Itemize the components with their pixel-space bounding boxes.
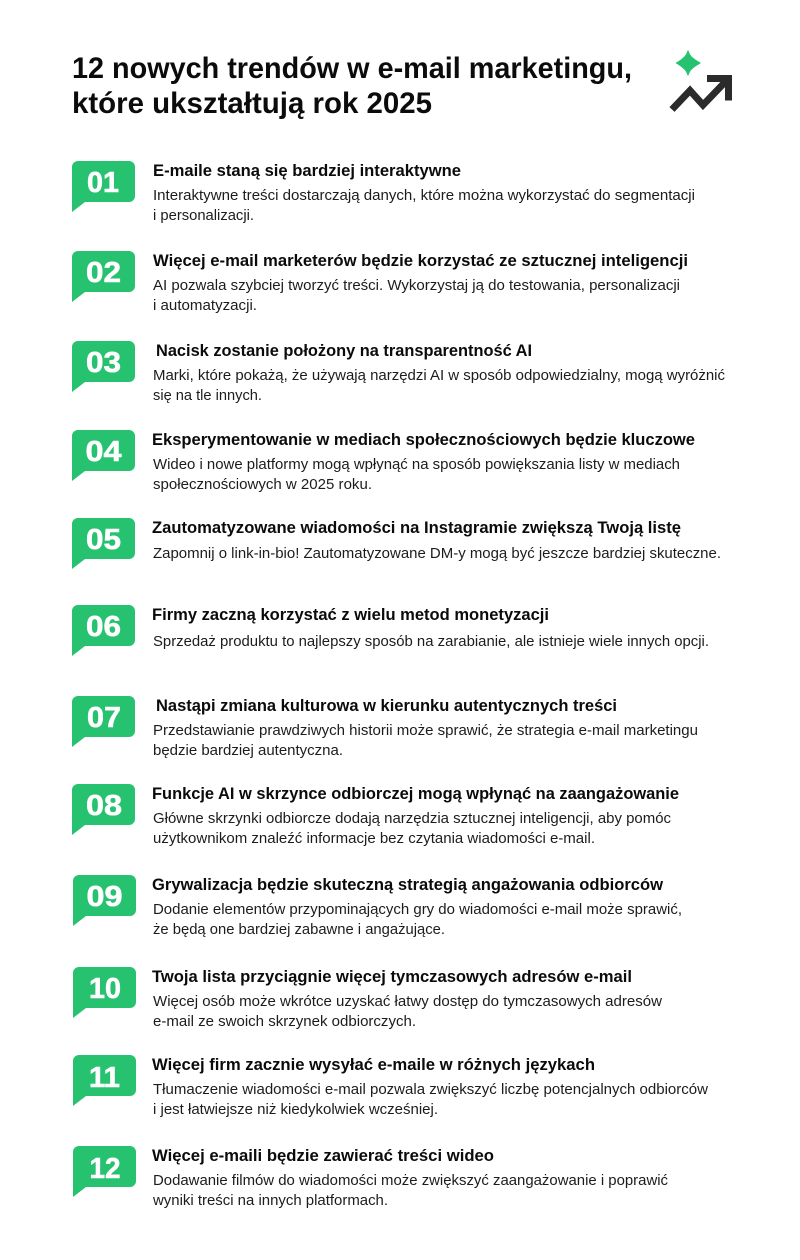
- item 03: Nacisk zostanie położony na transparentność AI: [156, 342, 532, 360]
- item 02: 02: [86, 257, 121, 289]
- item 07: [72, 696, 698, 759]
- item 07: Nastąpi zmiana kulturowa w kierunku autentycznych treści: [156, 697, 617, 715]
- item 11: 11: [89, 1062, 120, 1094]
- item 03: się na tle innych.: [153, 388, 262, 404]
- item 11: Tłumaczenie wiadomości e-mail pozwala zwiększyć liczbę potencjalnych odbiorców: [153, 1082, 709, 1098]
- item 06: [72, 605, 709, 656]
- item 06: Sprzedaż produktu to najlepszy sposób na zarabianie, ale istnieje wiele innych opcji.: [153, 634, 709, 650]
- item 12: Dodawanie filmów do wiadomości może zwiększyć zaangażowanie i poprawić: [153, 1173, 668, 1189]
- item 01: i personalizacji.: [153, 208, 254, 224]
- item 08: [72, 784, 679, 847]
- item 10: 10: [89, 973, 121, 1005]
- item 11: i jest łatwiejsze niż kiedykolwiek wcześniej.: [153, 1102, 438, 1118]
- item 04: Wideo i nowe platformy mogą wpłynąć na sposób powiększania listy w mediach: [153, 457, 680, 473]
- item 10: Twoja lista przyciągnie więcej tymczasowych adresów e-mail: [152, 968, 632, 986]
- item 01: E-maile staną się bardziej interaktywne: [153, 162, 461, 180]
- item 04: społecznościowych w 2025 roku.: [153, 477, 372, 493]
- item 06: 06: [86, 611, 121, 643]
- item 02: AI pozwala szybciej tworzyć treści. Wykorzystaj ją do testowania, personalizacji: [153, 278, 680, 294]
- item 04: Eksperymentowanie w mediach społecznościowych będzie kluczowe: [152, 431, 695, 449]
- item 11: Więcej firm zacznie wysyłać e-maile w różnych językach: [152, 1056, 595, 1074]
- item 09: 09: [86, 881, 122, 913]
- item 12: 12: [90, 1153, 120, 1185]
- item 05: Zautomatyzowane wiadomości na Instagramie zwiększą Twoją listę: [152, 519, 681, 537]
- item 03: [72, 341, 725, 404]
- item 02: Więcej e-mail marketerów będzie korzystać ze sztucznej inteligencji: [153, 252, 688, 270]
- item 09: [73, 875, 682, 938]
- item 09: że będą one bardziej zabawne i angażujące.: [153, 922, 445, 938]
- item 07: Przedstawianie prawdziwych historii może sprawić, że strategia e-mail marketingu: [153, 723, 698, 739]
- item 12: wyniki treści na innych platformach.: [152, 1193, 388, 1209]
- item 11: [73, 1055, 709, 1118]
- item 08: użytkownikom znaleźć informacje bez czytania wiadomości e-mail.: [153, 831, 595, 847]
- item 10: Więcej osób może wkrótce uzyskać łatwy dostęp do tymczasowych adresów: [153, 994, 663, 1010]
- title: [72, 52, 632, 120]
- item 07: 07: [87, 702, 121, 734]
- item 03: 03: [86, 347, 121, 379]
- item 10: [73, 967, 663, 1030]
- item 05: Zapomnij o link-in-bio! Zautomatyzowane DM-y mogą być jeszcze bardziej skuteczne.: [153, 546, 721, 562]
- title: 12 nowych trendów w e-mail marketingu,: [72, 52, 632, 85]
- item 08: Funkcje AI w skrzynce odbiorczej mogą wpłynąć na zaangażowanie: [152, 785, 679, 803]
- item 09: Grywalizacja będzie skuteczną strategią angażowania odbiorców: [152, 876, 663, 894]
- item 03: Marki, które pokażą, że używają narzędzi AI w sposób odpowiedzialny, mogą wyróżnić: [153, 368, 725, 384]
- item 05: 05: [86, 524, 121, 556]
- item 08: 08: [86, 790, 122, 822]
- item 08: Główne skrzynki odbiorcze dodają narzędzia sztucznej inteligencji, aby pomóc: [153, 811, 671, 827]
- item 04: 04: [86, 436, 122, 468]
- item 02: [72, 251, 688, 314]
- title: które ukształtują rok 2025: [72, 87, 432, 120]
- item 04: [72, 430, 695, 493]
- item 01: [72, 161, 695, 224]
- item 02: i automatyzacji.: [153, 298, 257, 314]
- icon: trend arrow with sparkle: [672, 51, 732, 110]
- item 05: [72, 518, 721, 569]
- item 12: Więcej e-maili będzie zawierać treści wideo: [152, 1147, 494, 1165]
- item 07: będzie bardziej autentyczna.: [153, 743, 343, 759]
- item 06: Firmy zaczną korzystać z wielu metod monetyzacji: [152, 606, 549, 624]
- item 12: [73, 1146, 668, 1209]
- item 01: Interaktywne treści dostarczają danych, które można wykorzystać do segmentacji: [153, 188, 695, 204]
- item 01: 01: [87, 167, 119, 199]
- item 10: e-mail ze swoich skrzynek odbiorczych.: [153, 1014, 416, 1030]
- item 09: Dodanie elementów przypominających gry do wiadomości e-mail może sprawić,: [153, 902, 682, 918]
